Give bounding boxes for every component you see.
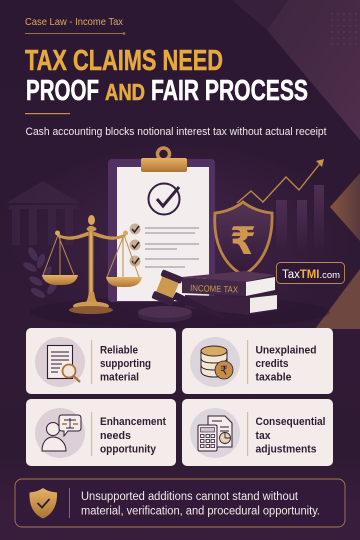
ground shadow (30, 296, 330, 328)
title underline (25, 113, 70, 114)
upper book (182, 271, 275, 282)
icon: shield check (29, 488, 57, 518)
label (256, 344, 316, 384)
label: Unexplained (256, 344, 316, 356)
title: AND (105, 79, 145, 105)
panel: reliable supporting material (26, 328, 176, 394)
label: Enhancement (100, 416, 166, 428)
label (100, 416, 166, 456)
lower book (185, 294, 277, 315)
illustration: rupee shield (215, 202, 272, 275)
label (256, 416, 326, 456)
illustration: faded bars (276, 185, 324, 252)
label: supporting (100, 358, 151, 370)
logo badge (276, 262, 344, 284)
illustration: income tax books (182, 271, 277, 315)
label: taxable (256, 372, 292, 384)
icon: coin stack with rupee: ₹ (220, 364, 228, 378)
illustration: balance scale (42, 215, 142, 314)
title: FAIR PROCESS (151, 75, 308, 107)
callout text: material, verification, and procedural opportunity. (81, 506, 320, 518)
title: TAX CLAIMS NEED (25, 45, 223, 77)
label: credits (256, 358, 288, 370)
illustration: gavel (138, 269, 225, 322)
panel: enhancement needs opportunity (26, 399, 176, 466)
panel: consequential tax adjustments (182, 399, 333, 466)
callout text: Unsupported additions cannot stand without (81, 491, 299, 503)
label: Reliable (100, 344, 138, 356)
checklist items (130, 224, 199, 268)
subtitle: Cash accounting blocks notional interest tax without actual receipt (26, 126, 326, 138)
label: Consequential (256, 416, 326, 428)
icon: person with scale bubble (35, 408, 85, 458)
illustration: rupee shield: ₹ (230, 219, 256, 263)
icon: large check circle (148, 184, 180, 214)
illustration: clipboard (108, 148, 215, 302)
icon: calculator and report (190, 408, 240, 458)
label (100, 344, 151, 384)
label: opportunity (100, 444, 157, 456)
icon: courthouse silhouette (6, 181, 80, 245)
logo badge: TaxTMI.com (282, 269, 340, 281)
callout text (81, 491, 320, 518)
icon: laurel branch (22, 246, 59, 300)
title (25, 45, 308, 107)
title: PROOF (26, 75, 99, 107)
label: needs (100, 430, 131, 442)
clipboard clip (141, 148, 187, 172)
illustration: income tax books: INCOME TAX (190, 283, 238, 295)
callout: conclusion banner (15, 479, 345, 527)
eyebrow label (25, 16, 125, 35)
eyebrow label: Case Law - Income Tax (25, 16, 124, 28)
icon: coin stack with rupee (190, 337, 240, 387)
panel: unexplained credits taxable (182, 328, 333, 394)
label: tax (256, 430, 271, 442)
icon: document magnifier (35, 337, 85, 387)
illustration: growth arrow (237, 159, 324, 203)
label: adjustments (256, 444, 316, 456)
label: material (100, 372, 139, 384)
